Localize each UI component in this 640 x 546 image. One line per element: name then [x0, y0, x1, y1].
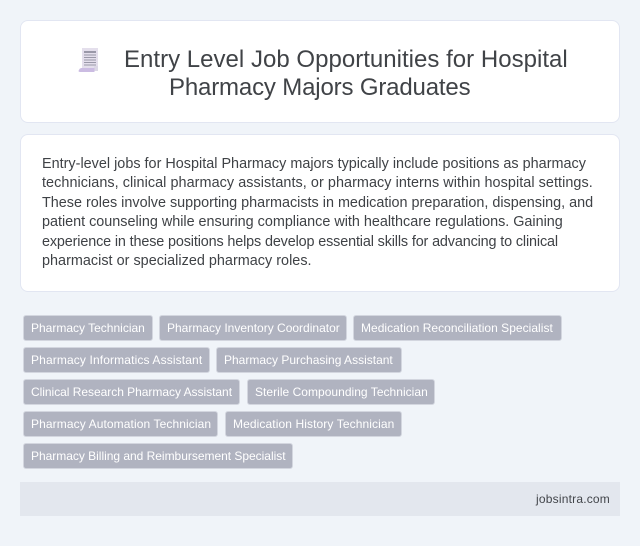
- title line 2: Pharmacy Majors Graduates: [169, 74, 470, 101]
- description line 4: patient counseling while ensuring compliance with healthcare regulations. Gaining: [42, 214, 563, 230]
- tag: [23, 347, 210, 373]
- footer source text: jobsintra.com: [536, 492, 610, 506]
- tag: Medication Reconciliation Specialist: [361, 321, 553, 335]
- tag: Pharmacy Billing and Reimbursement Specialist: [31, 449, 286, 463]
- description line 5: experience in these positions helps develop essential skills for advancing to clinical: [42, 234, 558, 250]
- tag: [216, 347, 402, 373]
- description line 3: These roles involve supporting pharmacists in medication preparation, dispensing, and: [42, 194, 593, 210]
- tag: [23, 411, 218, 437]
- footer bar: [20, 482, 620, 516]
- tag: [23, 315, 153, 341]
- tag: Clinical Research Pharmacy Assistant: [31, 385, 232, 399]
- panel: description card: [20, 134, 620, 292]
- tag: Pharmacy Inventory Coordinator: [167, 321, 340, 335]
- description line 1: Entry-level jobs for Hospital Pharmacy majors typically include positions as pharmacy: [42, 156, 586, 172]
- tag: Medication History Technician: [233, 417, 394, 431]
- tag: Pharmacy Informatics Assistant: [31, 353, 202, 367]
- description line 6: pharmacist or specialized pharmacy roles.: [42, 253, 312, 269]
- tag: Pharmacy Automation Technician: [31, 417, 211, 431]
- panel: job tags: [23, 315, 562, 469]
- tag: Pharmacy Technician: [31, 321, 145, 335]
- tag: [23, 379, 240, 405]
- tag: Pharmacy Purchasing Assistant: [224, 353, 393, 367]
- tag: Sterile Compounding Technician: [255, 385, 428, 399]
- tag: [23, 443, 293, 469]
- tag: [159, 315, 347, 341]
- description line 2: technicians, clinical pharmacy assistants, or pharmacy interns within hospital settings.: [42, 175, 593, 191]
- icon: prescription receipt: [78, 48, 98, 72]
- title line 1: Entry Level Job Opportunities for Hospital: [124, 46, 568, 73]
- tag: [225, 411, 402, 437]
- panel: title card: [20, 20, 620, 123]
- tag: [247, 379, 435, 405]
- tag: [353, 315, 562, 341]
